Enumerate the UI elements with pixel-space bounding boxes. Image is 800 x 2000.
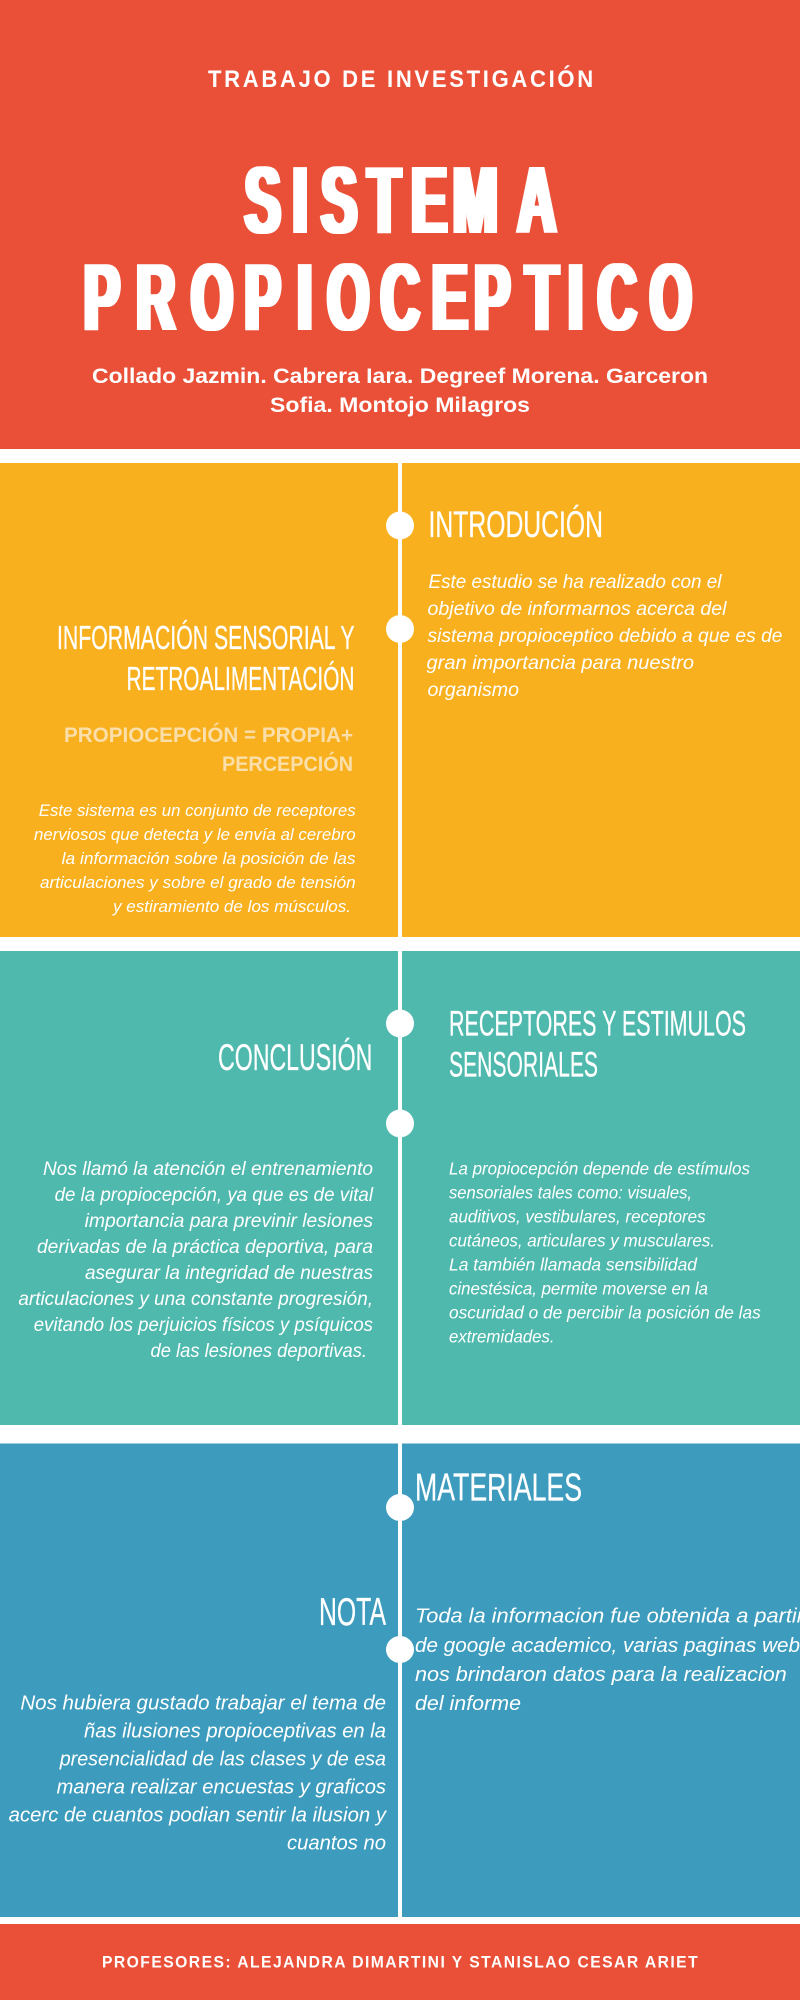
text: materiales paragraph: del informe: [415, 1692, 521, 1715]
text: conclusión paragraph: importancia para previnir lesiones: [85, 1211, 373, 1232]
heading: conclusión: CONCLUSIÓN: [218, 1037, 372, 1078]
text: sistema paragraph: nerviosos que detecta y le envía al cerebro: [34, 825, 356, 844]
authors: Collado Jazmin. Cabrera Iara. Degreef Morena. Garceron: [92, 365, 708, 388]
text: nota paragraph: Nos hubiera gustado trabajar el tema de: [20, 1692, 386, 1714]
text: materiales paragraph: de google academico, varias paginas web: [415, 1634, 800, 1657]
text: introducción paragraph: [426, 572, 782, 701]
text: introducción paragraph: gran importancia para nuestro: [426, 653, 694, 674]
heading: receptores: SENSORIALES: [449, 1046, 598, 1085]
panel: blue section: [0, 1444, 800, 1917]
panel: header: [0, 0, 800, 449]
title: PROPIOCEPTICO: [84, 245, 692, 351]
panel: footer: [0, 1924, 800, 2000]
text: materiales paragraph: Toda la informacion fue obtenida a partir: [415, 1605, 800, 1628]
text: receptores paragraph: La también llamada sensibilidad: [449, 1254, 698, 1274]
heading: información sensorial: [57, 619, 354, 697]
panel: yellow section: [0, 463, 800, 937]
text: sistema paragraph: Este sistema es un conjunto de receptores: [39, 801, 356, 820]
text: nota paragraph: acerc de cuantos podian sentir la ilusion y: [9, 1804, 387, 1826]
text: conclusión paragraph: articulaciones y una constante progresión,: [18, 1289, 373, 1310]
text: materiales paragraph: nos brindaron datos para la realizacion: [415, 1663, 787, 1686]
panel: teal section: [0, 951, 800, 1425]
text: receptores paragraph: cinestésica, permite moverse en la: [449, 1278, 708, 1298]
eyebrow: trabajo de investigación: TRABAJO DE INVESTIGACIÓN: [208, 64, 593, 92]
text: receptores paragraph: [449, 1158, 761, 1346]
heading: receptores: [449, 1005, 746, 1085]
text: receptores paragraph: auditivos, vestibulares, receptores: [449, 1206, 706, 1226]
text: receptores paragraph: La propiocepción depende de estímulos: [449, 1158, 750, 1178]
heading: información sensorial: RETROALIMENTACIÓN: [126, 660, 354, 697]
text: introducción paragraph: sistema propioceptico debido a que es de: [428, 626, 782, 647]
text: introducción paragraph: objetivo de informarnos acerca del: [428, 599, 727, 620]
text: nota paragraph: ñas ilusiones propioceptivas en la: [84, 1721, 386, 1743]
text: introducción paragraph: Este estudio se ha realizado con el: [428, 572, 722, 593]
text: sistema paragraph: la información sobre la posición de las: [62, 849, 356, 868]
heading: información sensorial: INFORMACIÓN SENSORIAL Y: [57, 619, 354, 656]
footer text: PROFESORES: ALEJANDRA DIMARTINI Y STANISLAO CESAR ARIET: [102, 1953, 698, 1972]
text: receptores paragraph: oscuridad o de percibir la posición de las: [449, 1302, 761, 1322]
authors: [92, 365, 708, 417]
heading: introdución: INTRODUCIÓN: [428, 504, 603, 545]
text: conclusión paragraph: Nos llamó la atención el entrenamiento: [43, 1159, 373, 1180]
text: nota paragraph: [9, 1692, 387, 1855]
timeline dots: [386, 512, 414, 1663]
subheading: propiocepción: [64, 723, 353, 776]
text: nota paragraph: manera realizar encuestas y graficos: [57, 1777, 386, 1799]
title: SISTEMA: [245, 148, 556, 254]
title: [84, 148, 692, 351]
text: conclusión paragraph: evitando los perjuicios físicos y psíquicos: [34, 1315, 373, 1336]
heading: materiales: MATERIALES: [415, 1466, 582, 1510]
subheading: propiocepción: PROPIOCEPCIÓN = PROPIA+: [64, 723, 353, 747]
text: sistema paragraph: articulaciones y sobre el grado de tensión: [40, 873, 356, 892]
text: receptores paragraph: sensoriales tales como: visuales,: [449, 1182, 692, 1202]
text: materiales paragraph: [415, 1605, 800, 1715]
text: introducción paragraph: organismo: [428, 680, 519, 701]
authors: Sofia. Montojo Milagros: [270, 394, 530, 417]
text: conclusión paragraph: de la propiocepción, ya que es de vital: [55, 1185, 374, 1206]
text: nota paragraph: cuantos no: [287, 1833, 386, 1855]
text: conclusión paragraph: derivadas de la práctica deportiva, para: [37, 1237, 373, 1258]
text: conclusión paragraph: [18, 1159, 374, 1362]
text: sistema paragraph: y estiramiento de los músculos.: [112, 897, 351, 916]
subheading: propiocepción: PERCEPCIÓN: [222, 752, 353, 776]
text: receptores paragraph: cutáneos, articulares y musculares.: [449, 1230, 715, 1250]
text: nota paragraph: presencialidad de las clases y de esa: [59, 1748, 386, 1770]
text: sistema paragraph: [34, 801, 356, 916]
text: receptores paragraph: extremidades.: [449, 1326, 555, 1346]
timeline line: [398, 463, 402, 1917]
text: conclusión paragraph: asegurar la integridad de nuestras: [85, 1263, 373, 1284]
heading: nota: NOTA: [319, 1591, 386, 1634]
text: conclusión paragraph: de las lesiones deportivas.: [150, 1341, 367, 1362]
